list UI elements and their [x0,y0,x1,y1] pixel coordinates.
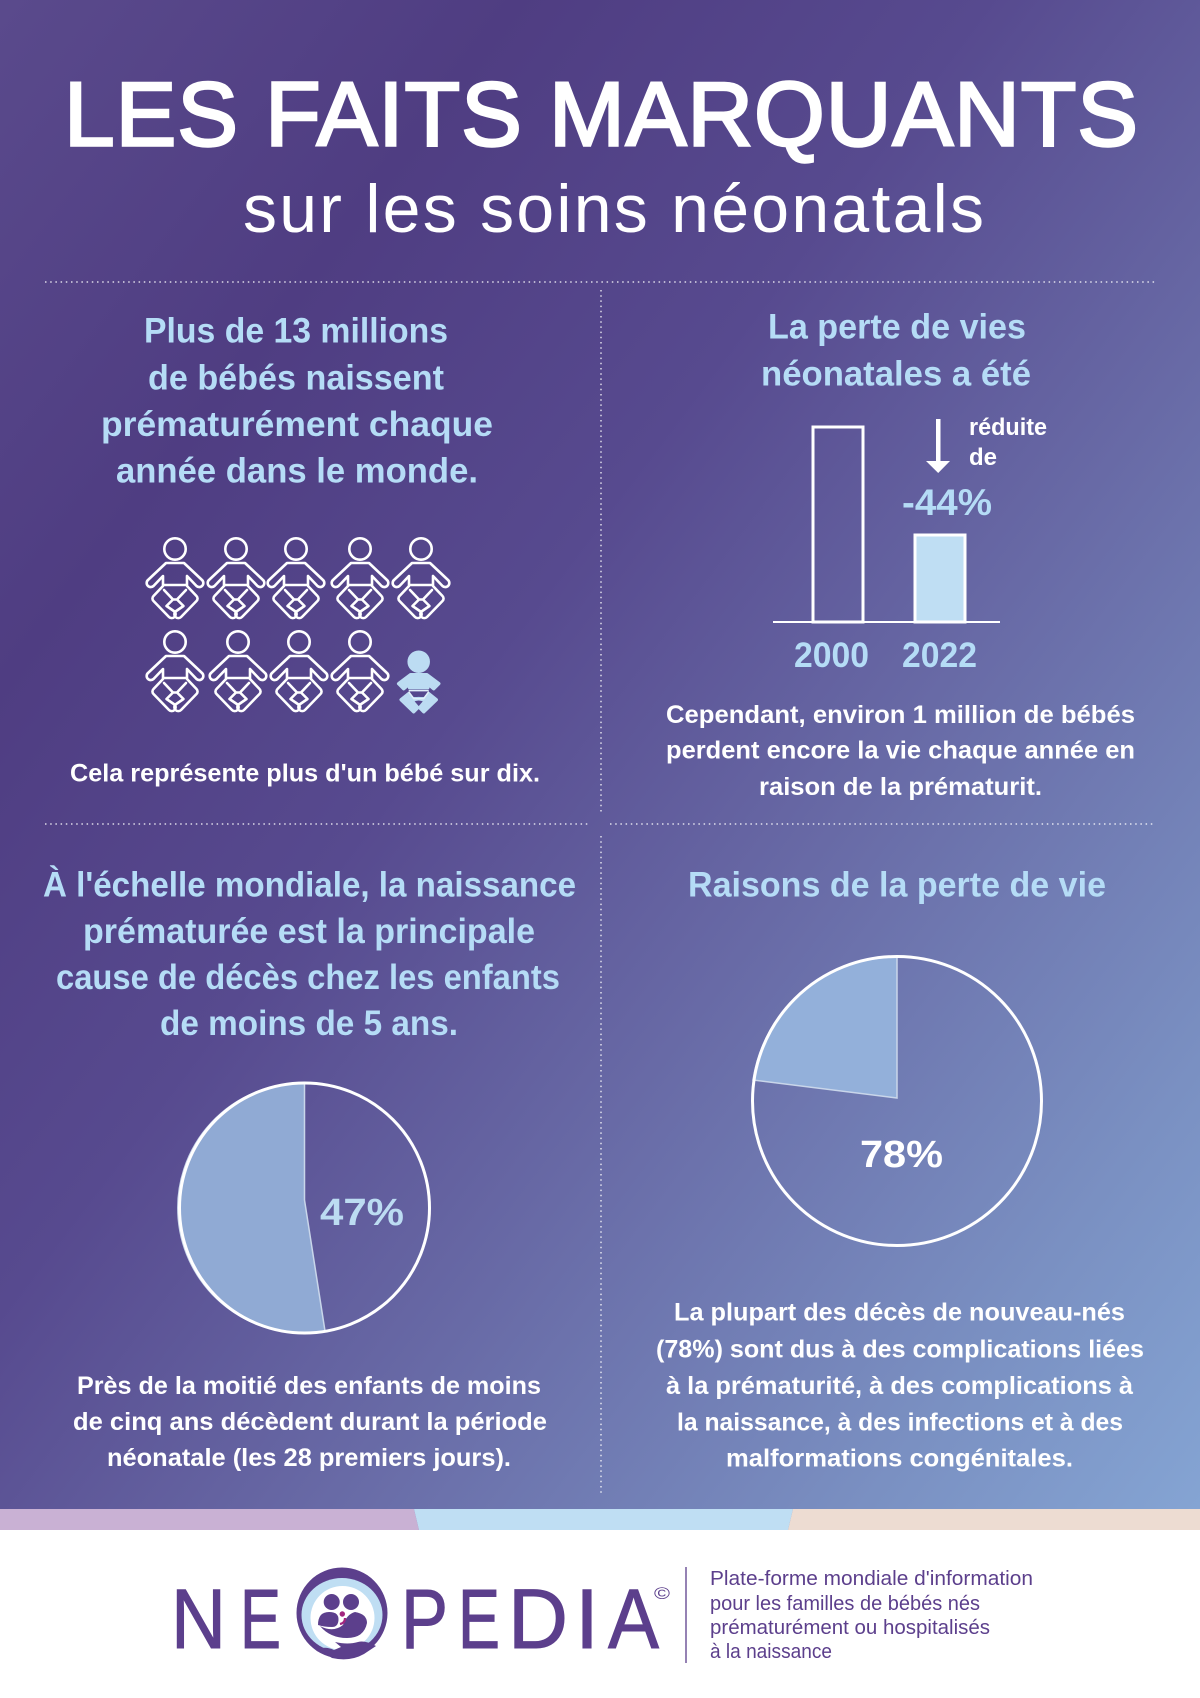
panel: reasons for death [656,866,1144,1472]
bar chart: 2000 vs 2022: 2022 [902,636,977,675]
heading: 13 million: année dans le monde. [116,452,478,490]
heading: 13 million: prématurément chaque [101,405,493,444]
text block: one million: Cependant, environ 1 million de bébés [666,701,1135,729]
pie chart: 47% [178,1083,430,1333]
colour band [0,1509,1200,1530]
heading: neonatal deaths: néonatales a été [761,354,1031,394]
heading: leading cause: de moins de 5 ans. [160,1004,458,1043]
bar chart: 2000 vs 2022 [773,427,1000,675]
wordmark: © [654,1584,671,1603]
pie chart: 78%: 78% [860,1134,943,1176]
wordmark: A [608,1572,659,1666]
bar chart: 2000 vs 2022: 2000 [794,636,869,675]
title: LES FAITS MARQUANTS [64,64,1138,166]
text block: half of under-fives [73,1372,547,1472]
number: -44%: -44% [902,482,992,523]
wordmark: I [575,1572,599,1666]
heading: 13 million: Plus de 13 millions [144,312,448,350]
heading: leading cause: prématurée est la principale [83,912,535,951]
tagline: Plate-forme mondiale d'information [710,1568,1033,1590]
text block: half of under-fives: Près de la moitié des enfants de moins [77,1372,541,1400]
label: reduced by: réduite [969,414,1047,441]
caption: Cela représente plus d'un bébé sur dix. [70,760,540,788]
heading: reasons: Raisons de la perte de vie [688,866,1106,904]
wordmark: D [508,1572,568,1666]
text block: one million: perdent encore la vie chaque année en [666,736,1135,764]
title: sur les soins néonatals [243,171,984,247]
heading: leading cause: cause de décès chez les enfants [56,958,560,997]
text block: half of under-fives: néonatale (les 28 premiers jours). [107,1444,511,1472]
heading: 13 million [101,312,493,490]
heading: leading cause: À l'échelle mondiale, la naissance [43,864,576,904]
text block: causes: (78%) sont dus à des complications liées [656,1336,1144,1364]
text block: causes: malformations congénitales. [726,1444,1073,1472]
text block: causes [656,1298,1144,1472]
logo: NEOPEDIA [171,1568,671,1666]
tagline: pour les familles de bébés nés [710,1593,980,1615]
tagline [710,1568,1033,1663]
text block: half of under-fives: de cinq ans décèdent durant la période [73,1408,547,1436]
heading: leading cause [43,864,576,1043]
heading: 13 million: de bébés naissent [148,358,444,398]
wordmark: E [240,1572,281,1666]
icon: logo mark [296,1568,388,1659]
heading: neonatal deaths [761,308,1031,394]
panel: premature births [70,312,540,788]
pie chart: 78% [752,956,1042,1246]
wordmark: P [401,1572,448,1666]
panel: reduction in neonatal deaths [666,308,1135,801]
text block: one million [666,701,1135,801]
label: reduced by: de [969,444,997,471]
text block: one million: raison de la prématurit. [759,773,1042,801]
panel: leading cause of death [43,864,576,1472]
text block: causes: à la prématurité, à des complications à [666,1372,1133,1400]
icon: ten babies pictogram [147,538,449,712]
wordmark: N [171,1572,226,1666]
wordmark: E [458,1572,500,1666]
text block: causes: La plupart des décès de nouveau-nés [674,1298,1125,1326]
heading: neonatal deaths: La perte de vies [768,308,1026,346]
pie chart: 47%: 47% [320,1192,404,1234]
arrow: down [926,419,950,473]
title [64,64,1138,247]
text block: causes: la naissance, à des infections et à des [677,1408,1123,1436]
wordmark [171,1572,671,1666]
tagline: à la naissance [710,1641,832,1663]
label: reduced by [969,414,1047,471]
tagline: prématurément ou hospitalisés [710,1617,990,1639]
